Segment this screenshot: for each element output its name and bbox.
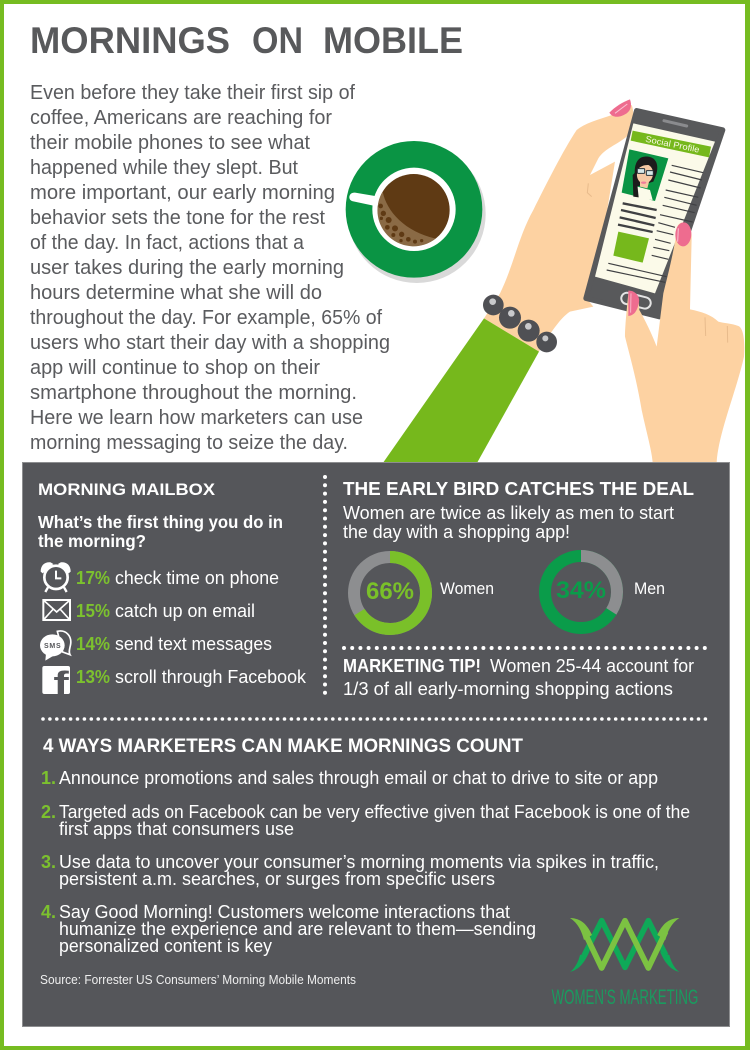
donut chart: women 66%: 66%	[366, 578, 414, 605]
profile body lines	[607, 165, 703, 282]
tip 1: Announce promotions and sales through email or chat to drive to site or app	[59, 767, 658, 788]
right finger nails	[675, 222, 692, 247]
left thumb nail	[609, 99, 631, 117]
intro text block: their mobile phones to see what	[30, 132, 310, 154]
left hand	[484, 105, 633, 352]
tip 4: 4.	[41, 902, 56, 922]
stat: text messages: send text messages	[115, 633, 272, 654]
icon: alarm clock	[41, 562, 71, 592]
intro text block: hours determine what she will do	[30, 282, 322, 304]
tip 3: 3.	[41, 852, 56, 872]
tip 4	[41, 901, 536, 956]
tip 3: persistent a.m. searches, or surges from specific users	[59, 868, 495, 889]
title	[30, 20, 463, 61]
heading: early bird: THE EARLY BIRD CATCHES THE DEAL	[343, 478, 694, 499]
panel: the early bird catches the deal	[343, 478, 710, 699]
intro text block: user takes during the early morning	[30, 257, 344, 279]
stat: check time: 17%	[76, 567, 110, 588]
right hand	[625, 223, 744, 462]
title: MOBILE	[323, 20, 463, 61]
intro text block: behavior sets the tone for the rest	[30, 207, 325, 229]
tip 3	[41, 851, 659, 889]
tip 2: 2.	[41, 802, 56, 822]
heading: 4 ways: 4 WAYS MARKETERS CAN MAKE MORNINGS COUNT	[43, 736, 523, 757]
sleeve	[383, 318, 539, 462]
stat: facebook: 13%	[76, 666, 110, 687]
intro text block: of the day. In fact, actions that a	[30, 232, 305, 254]
phone screen	[595, 123, 715, 293]
intro text block: Even before they take their first sip of	[30, 82, 355, 104]
tip 2: Targeted ads on Facebook can be very effective given that Facebook is one of the	[59, 801, 690, 822]
subheading: the day with a shopping app!	[343, 521, 570, 542]
intro text block: happened while they slept. But	[30, 157, 298, 179]
intro text block: app will continue to shop on their	[30, 357, 320, 379]
tip 2: first apps that consumers use	[59, 818, 294, 839]
icon: envelope	[43, 600, 70, 620]
intro text block: coffee, Americans are reaching for	[30, 107, 332, 129]
icon: sms bubbles: SMS	[44, 643, 61, 650]
tip 1: 1.	[41, 768, 56, 788]
marketing tip: MARKETING TIP!	[343, 655, 481, 676]
icon: coffee cup on saucer	[346, 141, 486, 283]
title: ON	[252, 20, 303, 61]
panel: morning mailbox	[38, 480, 307, 701]
tip 3: Use data to uncover your consumer’s morning moments via spikes in traffic,	[59, 851, 659, 872]
title: MORNINGS	[30, 20, 230, 61]
donut chart: women 66%	[354, 557, 494, 629]
bracelet	[483, 295, 557, 352]
intro text block: Here we learn how marketers can use	[30, 407, 363, 429]
stat: check time: check time on phone	[115, 567, 279, 588]
logo: women's marketing	[552, 918, 698, 1009]
donut chart: men 34%: Men	[634, 579, 665, 598]
question: What’s the first thing you do in	[38, 512, 283, 532]
stat: facebook: scroll through Facebook	[115, 666, 307, 687]
question: the morning?	[38, 531, 146, 551]
tip 4: humanize the experience and are relevant to them—sending	[59, 918, 536, 939]
intro text block: users who start their day with a shopping	[30, 332, 390, 354]
subheading: Women are twice as likely as men to start	[343, 502, 674, 523]
marketing tip: Women 25-44 account for	[490, 655, 694, 676]
illustration: hands holding smartphone: Social Profile	[645, 134, 701, 155]
question	[38, 512, 283, 551]
subheading	[343, 502, 674, 542]
tip 4: Say Good Morning! Customers welcome interactions that	[59, 901, 510, 922]
donut chart: men 34%: 34%	[556, 577, 606, 604]
intro text block: throughout the day. For example, 65% of	[30, 307, 382, 329]
heading: morning mailbox: MORNING MAILBOX	[38, 480, 216, 499]
donut chart: men 34%	[545, 556, 665, 628]
icon: facebook: f	[53, 664, 69, 701]
stat: email: 15%	[76, 600, 110, 621]
source: Source: Forrester US Consumers’ Morning Mobile Moments	[40, 973, 356, 987]
profile photo	[622, 149, 668, 201]
marketing tip	[343, 655, 694, 699]
intro text block: smartphone throughout the morning.	[30, 382, 357, 404]
stat: email: catch up on email	[115, 600, 255, 621]
phone body	[586, 111, 723, 317]
tip 4: personalized content is key	[59, 935, 273, 956]
illustration: hands holding smartphone	[383, 99, 744, 462]
marketing tip: 1/3 of all early-morning shopping actions	[343, 678, 673, 699]
icon: facebook	[42, 664, 70, 701]
icon: sms bubbles	[40, 631, 71, 661]
panel: 4 ways marketers	[40, 736, 690, 987]
intro text block: morning messaging to seize the day.	[30, 432, 348, 454]
intro text block: more important, our early morning	[30, 182, 335, 204]
dark content panel	[22, 462, 730, 1026]
donut chart: women 66%: Women	[440, 579, 494, 598]
home button	[620, 292, 652, 310]
intro text block	[30, 82, 390, 454]
tip 2	[41, 801, 690, 839]
stat: text messages: 14%	[76, 633, 110, 654]
